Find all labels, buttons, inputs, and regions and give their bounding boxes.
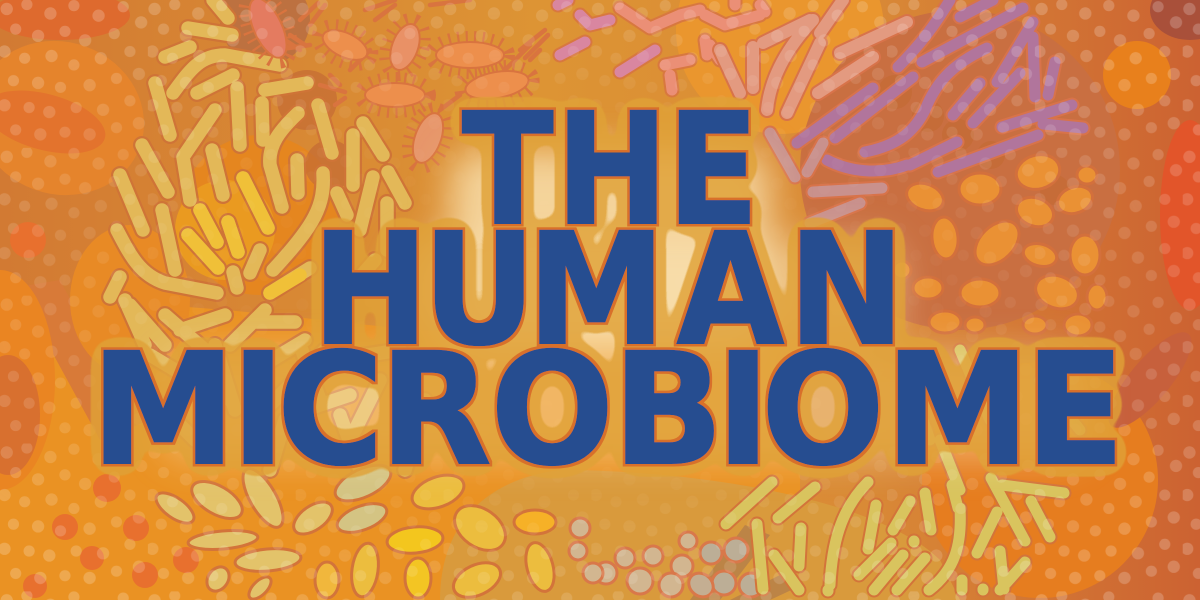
microbes: green beaded rods	[726, 350, 1080, 591]
microbes: grey round cells	[569, 518, 763, 600]
central glow	[160, 150, 1090, 460]
microbes: yellow rods	[110, 0, 425, 470]
microbes: bottom gold cells	[151, 458, 559, 600]
microbes: orange round cells	[893, 150, 1107, 336]
title: The Human Microbiome	[91, 81, 1124, 500]
microbes: purple rods	[720, 0, 1083, 223]
title line: THE: THE	[462, 81, 759, 260]
microbes: spiky pink cells	[242, 0, 548, 167]
title line: MICROBIOME: MICROBIOME	[91, 321, 1124, 500]
title line: HUMAN: HUMAN	[312, 200, 904, 380]
microbes: magenta beads	[558, 0, 765, 90]
